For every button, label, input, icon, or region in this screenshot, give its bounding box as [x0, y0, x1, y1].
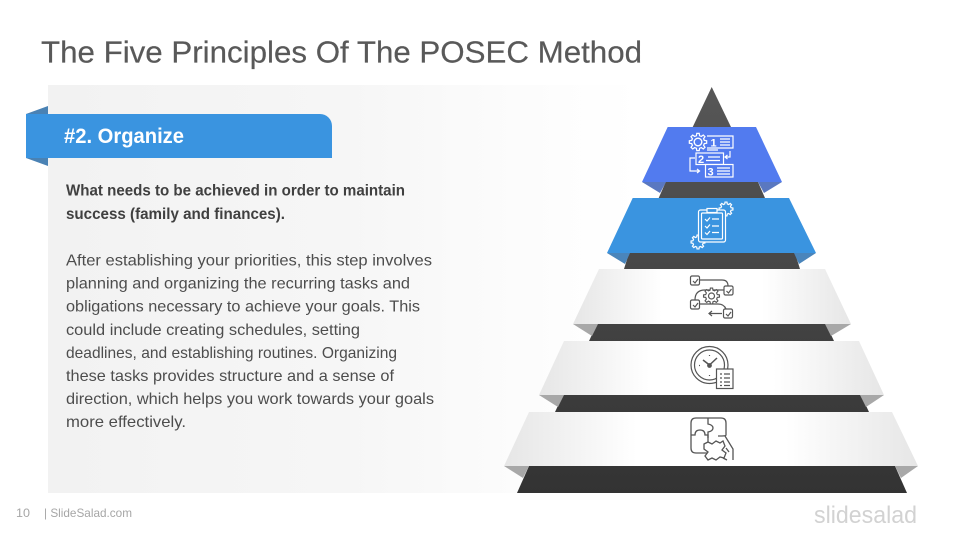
tier 1: blue band with numbered steps icon	[642, 127, 782, 193]
heading ribbon: #2. Organize: #2. Organize	[64, 125, 184, 148]
icon: gear and numbered list: 3	[708, 166, 714, 178]
pyramid dark core	[517, 87, 907, 493]
text block: key question: success (family and finances).	[66, 206, 285, 223]
icon: gear and numbered list: 1	[710, 138, 717, 150]
icon: clipboard with gears	[691, 202, 733, 249]
text block: description: deadlines, and establishing routines. Organizing	[66, 345, 397, 362]
icon: puzzle with hand	[691, 418, 733, 460]
icon: gear and numbered list	[689, 133, 733, 178]
icon: clock and document	[691, 346, 733, 388]
text block: description: these tasks provides structure and a sense of	[66, 368, 395, 385]
tier 3: white band with workflow icon	[573, 269, 851, 336]
text block: description: direction, which helps you work towards your goals	[66, 391, 434, 408]
title: The Five Principles Of The POSEC Method	[41, 34, 642, 70]
panel: content background	[48, 85, 640, 493]
pyramid diagram	[504, 87, 918, 493]
text block: description: planning and organizing the recurring tasks and	[66, 276, 410, 292]
footer: page number and site: 10	[16, 506, 30, 520]
footer: page number and site: | SlideSalad.com	[44, 506, 132, 520]
tier 4: white band with clock icon	[539, 341, 884, 407]
text block: description: more effectively.	[66, 414, 186, 431]
heading ribbon: #2. Organize	[26, 106, 332, 166]
icon: workflow checks and gear	[690, 276, 733, 318]
tier 2: blue band with checklist icon	[607, 198, 816, 264]
text block: description: could include creating schedules, setting	[66, 322, 360, 339]
text block: description: obligations necessary to achieve your goals. This	[66, 298, 420, 316]
tier 5: white band with puzzle icon	[504, 412, 918, 478]
text block: key question: What needs to be achieved in order to maintain	[66, 182, 405, 200]
text block: key question	[66, 182, 405, 223]
icon: gear and numbered list: 2	[698, 154, 704, 166]
text block: description: After establishing your priorities, this step involves	[66, 252, 432, 270]
text block: description	[66, 252, 434, 431]
logo: slidesalad: slidesalad	[814, 502, 917, 529]
